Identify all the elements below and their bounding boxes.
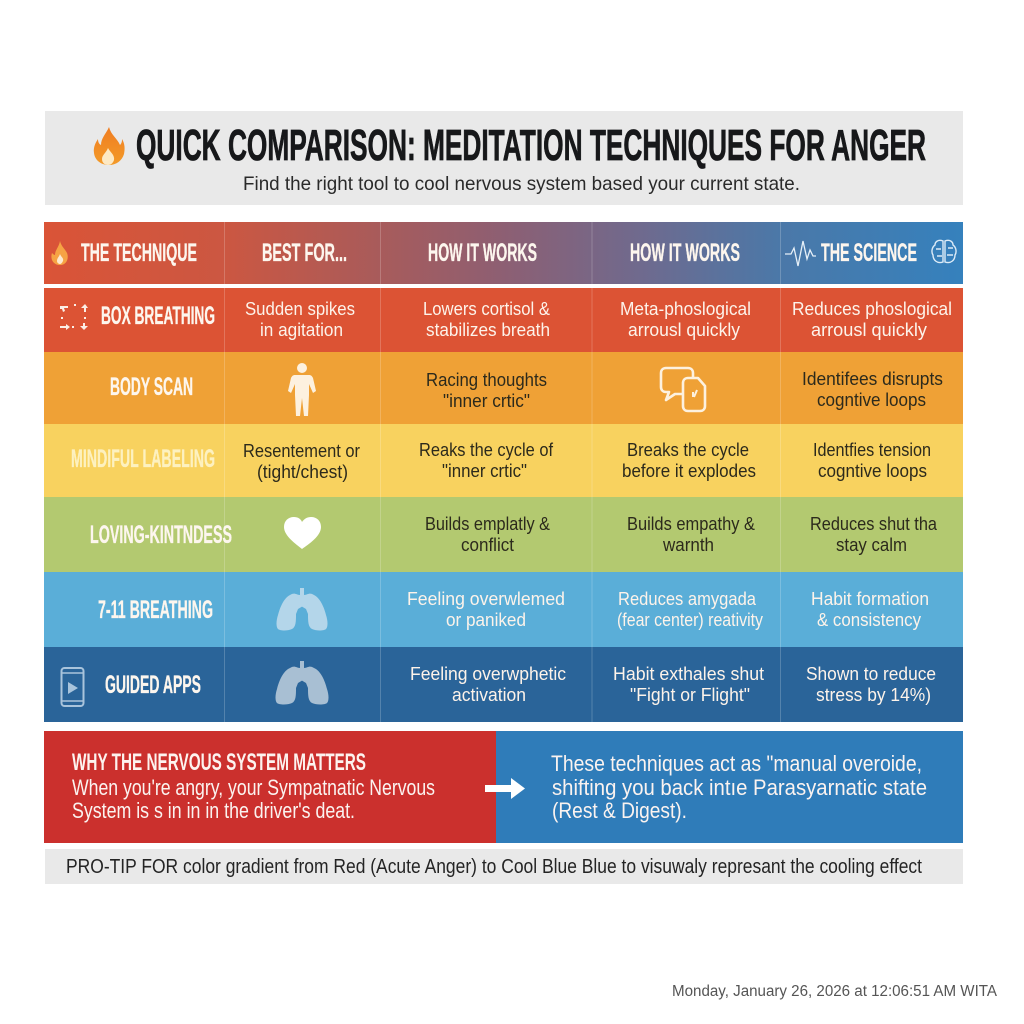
technique name: MINDIFUL LABELING bbox=[71, 445, 215, 473]
how it works text: Racing thoughts bbox=[426, 369, 547, 390]
how it works text 2 bbox=[627, 513, 756, 555]
how it works text: Lowers cortisol & bbox=[423, 298, 551, 319]
pro tip text: PRO-TIP FOR color gradient from Red (Acute Anger) to Cool Blue Blue to visuwaly represant the cooling effect bbox=[66, 856, 922, 878]
panel body bbox=[551, 751, 927, 823]
icon: lungs bbox=[276, 661, 328, 704]
science text: Identfies tension bbox=[813, 439, 931, 460]
how it works text 2 bbox=[620, 298, 751, 340]
panel body: shifting you back intıe Parasyarnatic state bbox=[552, 775, 927, 800]
how it works text: Builds emplatly & bbox=[425, 513, 551, 534]
science text: cogntive loops bbox=[818, 460, 927, 481]
how it works text: conflict bbox=[461, 534, 514, 555]
arrow bbox=[485, 778, 525, 799]
how it works text: Reaks the cycle of bbox=[419, 439, 554, 460]
how it works text bbox=[410, 663, 566, 705]
icon: heart bbox=[284, 517, 321, 549]
timestamp: Monday, January 26, 2026 at 12:06:51 AM WITA bbox=[672, 983, 998, 1000]
how it works text 2 bbox=[617, 588, 764, 630]
row: guided apps bbox=[44, 647, 963, 722]
how it works text bbox=[407, 588, 565, 630]
how it works text 2 bbox=[622, 439, 756, 481]
header: the technique: THE TECHNIQUE bbox=[81, 239, 197, 267]
science text bbox=[813, 439, 931, 481]
science text: cogntive loops bbox=[817, 389, 926, 410]
title panel bbox=[45, 111, 963, 205]
how it works text: activation bbox=[452, 684, 526, 705]
best for text: (tight/chest) bbox=[257, 461, 348, 482]
icon: small flame bbox=[51, 241, 68, 265]
how it works text: Feeling overwlemed bbox=[407, 588, 565, 609]
header: how it works 1: HOW IT WORKS bbox=[428, 239, 537, 267]
technique name: LOVING-KINTNDESS bbox=[90, 521, 232, 549]
science text bbox=[806, 663, 936, 705]
how it works text 2: Reduces amygada bbox=[618, 588, 757, 609]
science text bbox=[792, 298, 952, 340]
science text: Reduces shut tha bbox=[810, 513, 938, 534]
science text bbox=[811, 588, 929, 630]
panel body: When you're angry, your Sympatnatic Nervous bbox=[72, 775, 435, 800]
best for text bbox=[243, 440, 360, 482]
best for text: in agitation bbox=[260, 319, 343, 340]
science text: stay calm bbox=[836, 534, 907, 555]
science text: Habit formation bbox=[811, 588, 929, 609]
how it works text 2: Breaks the cycle bbox=[627, 439, 749, 460]
how it works text bbox=[426, 369, 547, 411]
icon: phone bbox=[62, 668, 84, 706]
science text: & consistency bbox=[817, 609, 922, 630]
best for text bbox=[245, 298, 355, 340]
icon: lungs bbox=[276, 588, 328, 630]
how it works text 2: Meta-phoslogical bbox=[620, 298, 751, 319]
icon: breathing box bbox=[60, 304, 88, 330]
science text: stress by 14%) bbox=[816, 684, 931, 705]
science text bbox=[810, 513, 938, 555]
how it works text 2: "Fight or Flight" bbox=[630, 684, 750, 705]
science text bbox=[802, 368, 943, 410]
how it works text: stabilizes breath bbox=[426, 319, 550, 340]
technique name: 7-11 BREATHING bbox=[98, 596, 213, 624]
how it works text: "inner crtic" bbox=[443, 390, 530, 411]
header: best for: BEST FOR... bbox=[262, 239, 347, 267]
technique name: GUIDED APPS bbox=[105, 671, 201, 699]
subtitle: Find the right tool to cool nervous system based your current state. bbox=[243, 173, 800, 195]
science text: Reduces phoslogical bbox=[792, 298, 952, 319]
icon: person bbox=[288, 363, 316, 416]
technique name: BOX BREATHING bbox=[101, 302, 215, 330]
icon: flame bbox=[94, 127, 125, 165]
technique name: BODY SCAN bbox=[110, 373, 193, 401]
best for text: Resentement or bbox=[243, 440, 360, 461]
icon: brain bbox=[932, 240, 956, 263]
icon: pulse line bbox=[785, 241, 816, 266]
science text: Identifees disrupts bbox=[802, 368, 943, 389]
how it works text bbox=[425, 513, 551, 555]
how it works text 2: warnth bbox=[662, 534, 714, 555]
science text: arrousl quickly bbox=[811, 319, 928, 340]
panel body bbox=[72, 775, 435, 823]
how it works text: "inner crtic" bbox=[442, 460, 527, 481]
how it works text 2 bbox=[613, 663, 764, 705]
how it works text: Feeling overwphetic bbox=[410, 663, 566, 684]
row: body scan bbox=[44, 352, 963, 424]
how it works text bbox=[419, 439, 554, 481]
how it works text: or paniked bbox=[446, 609, 526, 630]
pro tip bar bbox=[45, 849, 963, 884]
how it works text 2: (fear center) reativity bbox=[617, 609, 764, 630]
panel body: System is s in in in the driver's deat. bbox=[72, 798, 355, 823]
how it works text bbox=[423, 298, 551, 340]
how it works text 2: arrousl quickly bbox=[628, 319, 741, 340]
panel: why the nervous system matters bbox=[44, 731, 496, 843]
row: 7-11 breathing bbox=[44, 572, 963, 647]
how it works text 2: Builds empathy & bbox=[627, 513, 756, 534]
header: the science: THE SCIENCE bbox=[821, 239, 917, 267]
table header row bbox=[44, 222, 963, 284]
panel heading: WHY THE NERVOUS SYSTEM MATTERS bbox=[72, 749, 366, 776]
panel body: (Rest & Digest). bbox=[552, 798, 687, 823]
how it works text 2: before it explodes bbox=[622, 460, 756, 481]
row: box breathing bbox=[44, 288, 963, 352]
best for text: Sudden spikes bbox=[245, 298, 355, 319]
row: loving-kindness bbox=[44, 497, 963, 572]
header: how it works 2: HOW IT WORKS bbox=[630, 239, 740, 267]
row: mindful labeling bbox=[44, 424, 963, 497]
science text: Shown to reduce bbox=[806, 663, 936, 684]
how it works text 2: Habit exthales shut bbox=[613, 663, 764, 684]
panel: manual override bbox=[496, 731, 963, 843]
icon: chat bubbles bbox=[661, 368, 705, 411]
panel body: These techniques act as "manual overoide, bbox=[551, 751, 922, 776]
